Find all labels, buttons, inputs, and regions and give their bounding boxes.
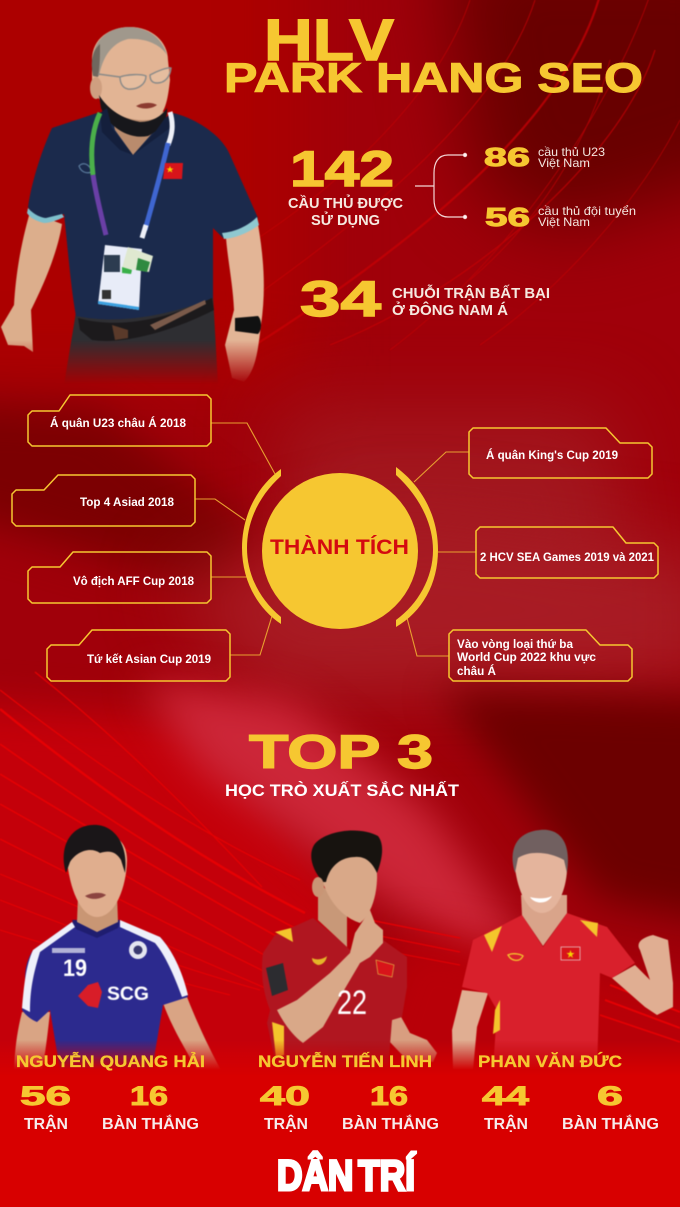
ear [90, 77, 102, 99]
heading: top 3: TOP 3 [249, 725, 433, 778]
stat: 142 players: CẦU THỦ ĐƯỢC [288, 194, 403, 212]
collar [100, 108, 133, 155]
box: Asiad [12, 475, 195, 526]
achievements connectors [195, 423, 476, 656]
stat: 86 U23: cầu thủ U23 [538, 145, 605, 159]
heading: top 3: HỌC TRÒ XUẤT SẮC NHẤT [225, 781, 460, 800]
face mask [99, 95, 167, 137]
achievements hub [242, 467, 438, 629]
player: Nguyen Tien Linh stats: BÀN THẮNG [342, 1115, 439, 1133]
stat: 56 national team: Việt Nam [538, 215, 590, 229]
achievement labels: Á quân U23 châu Á 2018 [50, 415, 186, 430]
achievement labels: Tứ kết Asian Cup 2019 [87, 652, 211, 666]
bracket connector [415, 153, 467, 219]
player photo: Nguyen Quang Hai [14, 825, 222, 1072]
box: King's Cup [469, 428, 652, 478]
logo: Dan Tri: DÂN TRÍ [277, 1151, 416, 1200]
flag [163, 163, 183, 179]
title: HLV [264, 8, 394, 73]
head [92, 27, 170, 120]
box: AFF [28, 552, 211, 603]
achievement labels: World Cup 2022 khu vực [457, 650, 596, 664]
player: Nguyen Quang Hai stats: NGUYỄN QUANG HẢI [16, 1052, 205, 1071]
player: Phan Van Duc stats: BÀN THẮNG [562, 1115, 659, 1133]
emblem [79, 164, 92, 173]
player: Nguyen Tien Linh stats [258, 1052, 439, 1133]
title [224, 8, 643, 101]
achievement boxes [12, 395, 658, 681]
stat: 34 unbeaten [300, 271, 550, 327]
player photo: Phan Van Duc [452, 830, 673, 1070]
player photo: Nguyen Tien Linh [262, 830, 437, 1070]
arm right [225, 224, 264, 382]
achievement labels: Vào vòng loại thứ ba [457, 637, 573, 651]
box: SEA Games [476, 527, 658, 578]
sleeve cuffs [27, 208, 64, 223]
player: Nguyen Tien Linh stats: NGUYỄN TIẾN LINH [258, 1052, 432, 1071]
box: Asian Cup [47, 630, 230, 681]
mouth [136, 103, 157, 109]
arm left [1, 212, 62, 352]
player: Phan Van Duc stats [478, 1052, 659, 1133]
player: Phan Van Duc stats: 6 [597, 1081, 623, 1111]
illustration: coach Park Hang Seo [1, 27, 264, 385]
neck [114, 111, 164, 156]
achievement labels: Á quân King's Cup 2019 [486, 447, 618, 462]
achievements hub: THÀNH TÍCH [270, 536, 409, 559]
glasses [98, 68, 171, 89]
shirt [28, 112, 258, 319]
stat: 86 U23: 86 [484, 142, 530, 172]
player: Phan Van Duc stats: PHAN VĂN ĐỨC [478, 1052, 622, 1071]
stat: 34 unbeaten: 34 [300, 271, 381, 327]
belt [78, 298, 214, 341]
player photo: Nguyen Quang Hai: SCG [107, 984, 149, 1005]
achievement labels: 2 HCV SEA Games 2019 và 2021 [480, 550, 654, 564]
achievement labels: Top 4 Asiad 2018 [80, 495, 174, 509]
stat: 34 unbeaten: Ở ĐÔNG NAM Á [392, 301, 508, 319]
stat: 142 players: SỬ DỤNG [311, 211, 380, 229]
stat: 34 unbeaten: CHUỖI TRẬN BẤT BẠI [392, 284, 550, 302]
player photo: Nguyen Tien Linh: 22 [337, 984, 367, 1022]
title: PARK HANG SEO [224, 54, 643, 101]
player: Phan Van Duc stats: 44 [482, 1081, 529, 1111]
pants [64, 296, 218, 385]
stat: 56 national team: 56 [485, 202, 530, 232]
achievement labels: Vô địch AFF Cup 2018 [73, 574, 194, 588]
stat: 142 players: 142 [290, 141, 394, 197]
player: Phan Van Duc stats: TRẬN [484, 1115, 528, 1133]
player: Nguyen Quang Hai stats [16, 1052, 205, 1133]
stat: 56 national team: cầu thủ đội tuyển [538, 204, 636, 218]
box: U23 [28, 395, 211, 446]
achievement labels: châu Á [457, 663, 496, 678]
hair [92, 27, 167, 76]
player: Nguyen Tien Linh stats: 16 [370, 1081, 408, 1111]
box: World Cup [449, 630, 632, 681]
player: Nguyen Quang Hai stats: TRẬN [24, 1115, 68, 1133]
stat: 142 players [288, 141, 403, 229]
player: Nguyen Tien Linh stats: TRẬN [264, 1115, 308, 1133]
stat: 86 U23: Việt Nam [538, 156, 590, 170]
watch [235, 316, 261, 334]
achievement labels [50, 415, 654, 678]
player: Nguyen Quang Hai stats: 56 [20, 1081, 71, 1111]
stat: 86 U23 [484, 142, 605, 172]
stat: 56 national team [485, 202, 636, 232]
player: Nguyen Quang Hai stats: 16 [130, 1081, 168, 1111]
player photo: Nguyen Quang Hai: 19 [63, 955, 87, 982]
badge [98, 245, 153, 310]
heading: top 3 [225, 725, 460, 800]
lanyard [92, 113, 100, 175]
player: Nguyen Tien Linh stats: 40 [260, 1081, 310, 1111]
player: Nguyen Quang Hai stats: BÀN THẮNG [102, 1115, 199, 1133]
